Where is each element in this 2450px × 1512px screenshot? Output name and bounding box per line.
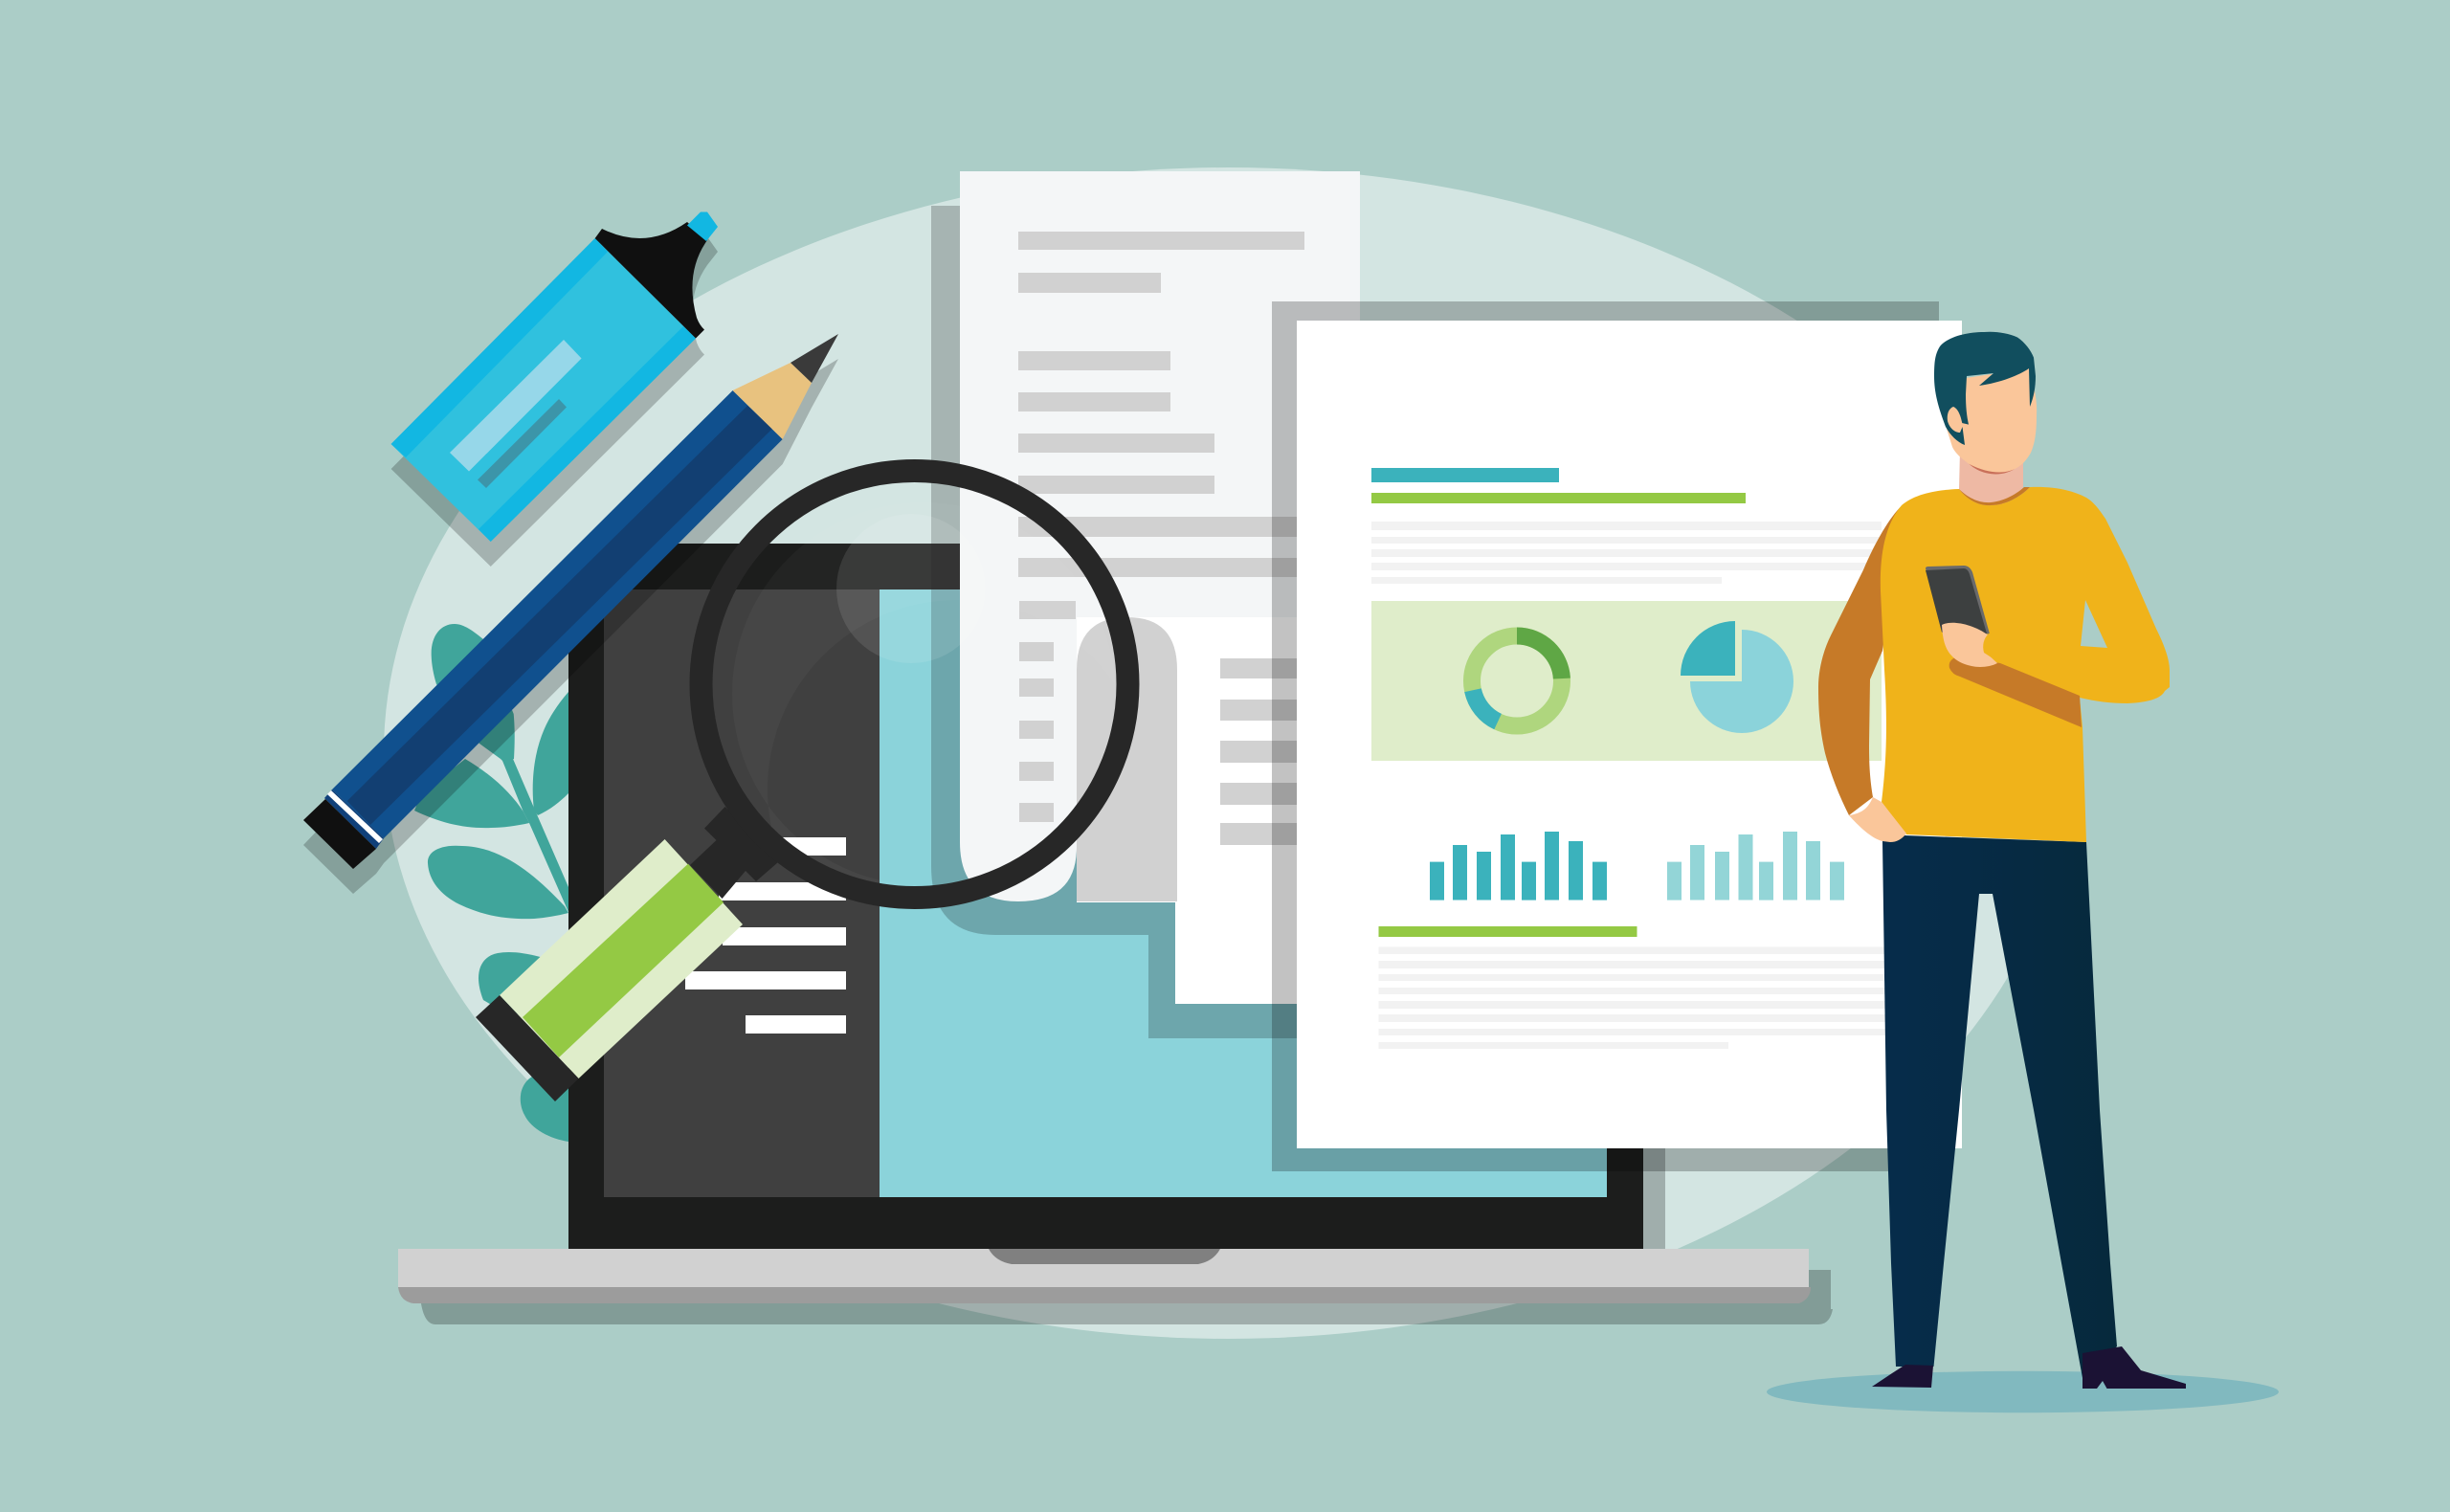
teal bar chart bbox=[1430, 832, 1607, 901]
handle end cap bbox=[476, 995, 579, 1101]
highlighter lower stripe bbox=[479, 326, 696, 542]
sweater bbox=[1881, 487, 2170, 842]
handle grip bbox=[500, 839, 743, 1078]
right shoe bbox=[2082, 1346, 2186, 1389]
donut chart bbox=[1464, 628, 1570, 729]
hand holding phone bbox=[1942, 623, 1997, 667]
upper paragraph lines bbox=[1371, 522, 1882, 584]
pencil lead bbox=[791, 334, 838, 383]
base lower lip bbox=[398, 1287, 1811, 1303]
pencil body bbox=[332, 390, 783, 838]
laptop shadow bbox=[1643, 1139, 1665, 1249]
arm gap bbox=[2081, 600, 2107, 648]
neck bbox=[1959, 450, 2023, 506]
far sleeve bbox=[1818, 506, 1902, 815]
page subtitle bar bbox=[1371, 493, 1746, 503]
light bar chart bbox=[1667, 832, 1844, 901]
pencil wood bbox=[733, 363, 812, 439]
base deck bbox=[398, 1249, 1809, 1287]
background ellipse bbox=[384, 167, 2072, 1339]
pencil shadow bbox=[303, 359, 838, 894]
laptop screen bbox=[568, 544, 1643, 1249]
handle green band bbox=[523, 864, 724, 1057]
screen main area bbox=[880, 589, 1607, 1197]
curled upper sheet bbox=[960, 171, 1360, 901]
handle neck bbox=[690, 807, 778, 899]
base notch bbox=[989, 1249, 1220, 1264]
lower heading bar bbox=[1378, 926, 1637, 937]
face bbox=[1947, 368, 2037, 473]
highlighter label bbox=[450, 340, 582, 471]
magnifying glass bbox=[476, 471, 1147, 1101]
sleeve cuff bbox=[1983, 622, 2038, 663]
hair bbox=[1934, 332, 2036, 445]
highlighter body bbox=[391, 238, 696, 542]
back leg and trousers bbox=[1882, 835, 2117, 1378]
screen sidebar bbox=[604, 589, 880, 1197]
pencil band bbox=[324, 789, 384, 849]
pencil eraser bbox=[303, 799, 376, 869]
left shoe bbox=[1872, 1365, 1933, 1388]
highlighter label mark bbox=[478, 399, 567, 488]
page title bar bbox=[1371, 468, 1559, 482]
ear bbox=[1948, 407, 1963, 433]
highlighter tip bbox=[687, 212, 718, 241]
collar bbox=[1959, 487, 2030, 505]
chart panel bbox=[1371, 601, 1882, 761]
sidebar text lines bbox=[685, 837, 846, 1034]
laptop base shadow bbox=[420, 1270, 1833, 1324]
phone bbox=[1926, 566, 1990, 634]
pencil white stripe bbox=[327, 790, 383, 843]
jaw shadow bbox=[1964, 457, 2017, 474]
report page shadow bbox=[1272, 301, 1939, 1171]
ground shadow under person bbox=[1767, 1371, 2279, 1412]
highlighter bbox=[391, 212, 718, 542]
plant leaves bbox=[414, 624, 568, 1142]
highlighter cap bbox=[595, 222, 707, 339]
person bbox=[1818, 332, 2186, 1389]
lower paragraph lines bbox=[1378, 947, 1885, 1049]
white lower sheet bbox=[1077, 617, 1360, 1004]
pie chart bbox=[1681, 621, 1793, 733]
page sheet bbox=[1297, 321, 1962, 1148]
highlighter shadow bbox=[391, 237, 718, 567]
receipt paper shadow bbox=[931, 206, 1297, 1038]
lower hand bbox=[1849, 797, 1906, 842]
highlighter upper stripe bbox=[391, 238, 608, 457]
report page bbox=[1297, 321, 1962, 1148]
lens ring bbox=[701, 471, 1127, 898]
receipt paper bbox=[960, 171, 1360, 1004]
paper text lines bbox=[1018, 232, 1304, 845]
illustration: data analysis scene bbox=[303, 167, 2279, 1412]
screen frame bbox=[568, 544, 1643, 1249]
pencil centre facet bbox=[347, 406, 772, 825]
laptop base bbox=[398, 1249, 1811, 1303]
pencil bbox=[303, 334, 838, 869]
lens highlights bbox=[836, 517, 960, 663]
folded grey sheet bbox=[1077, 617, 1177, 901]
forearm shadow bbox=[1949, 656, 2082, 727]
